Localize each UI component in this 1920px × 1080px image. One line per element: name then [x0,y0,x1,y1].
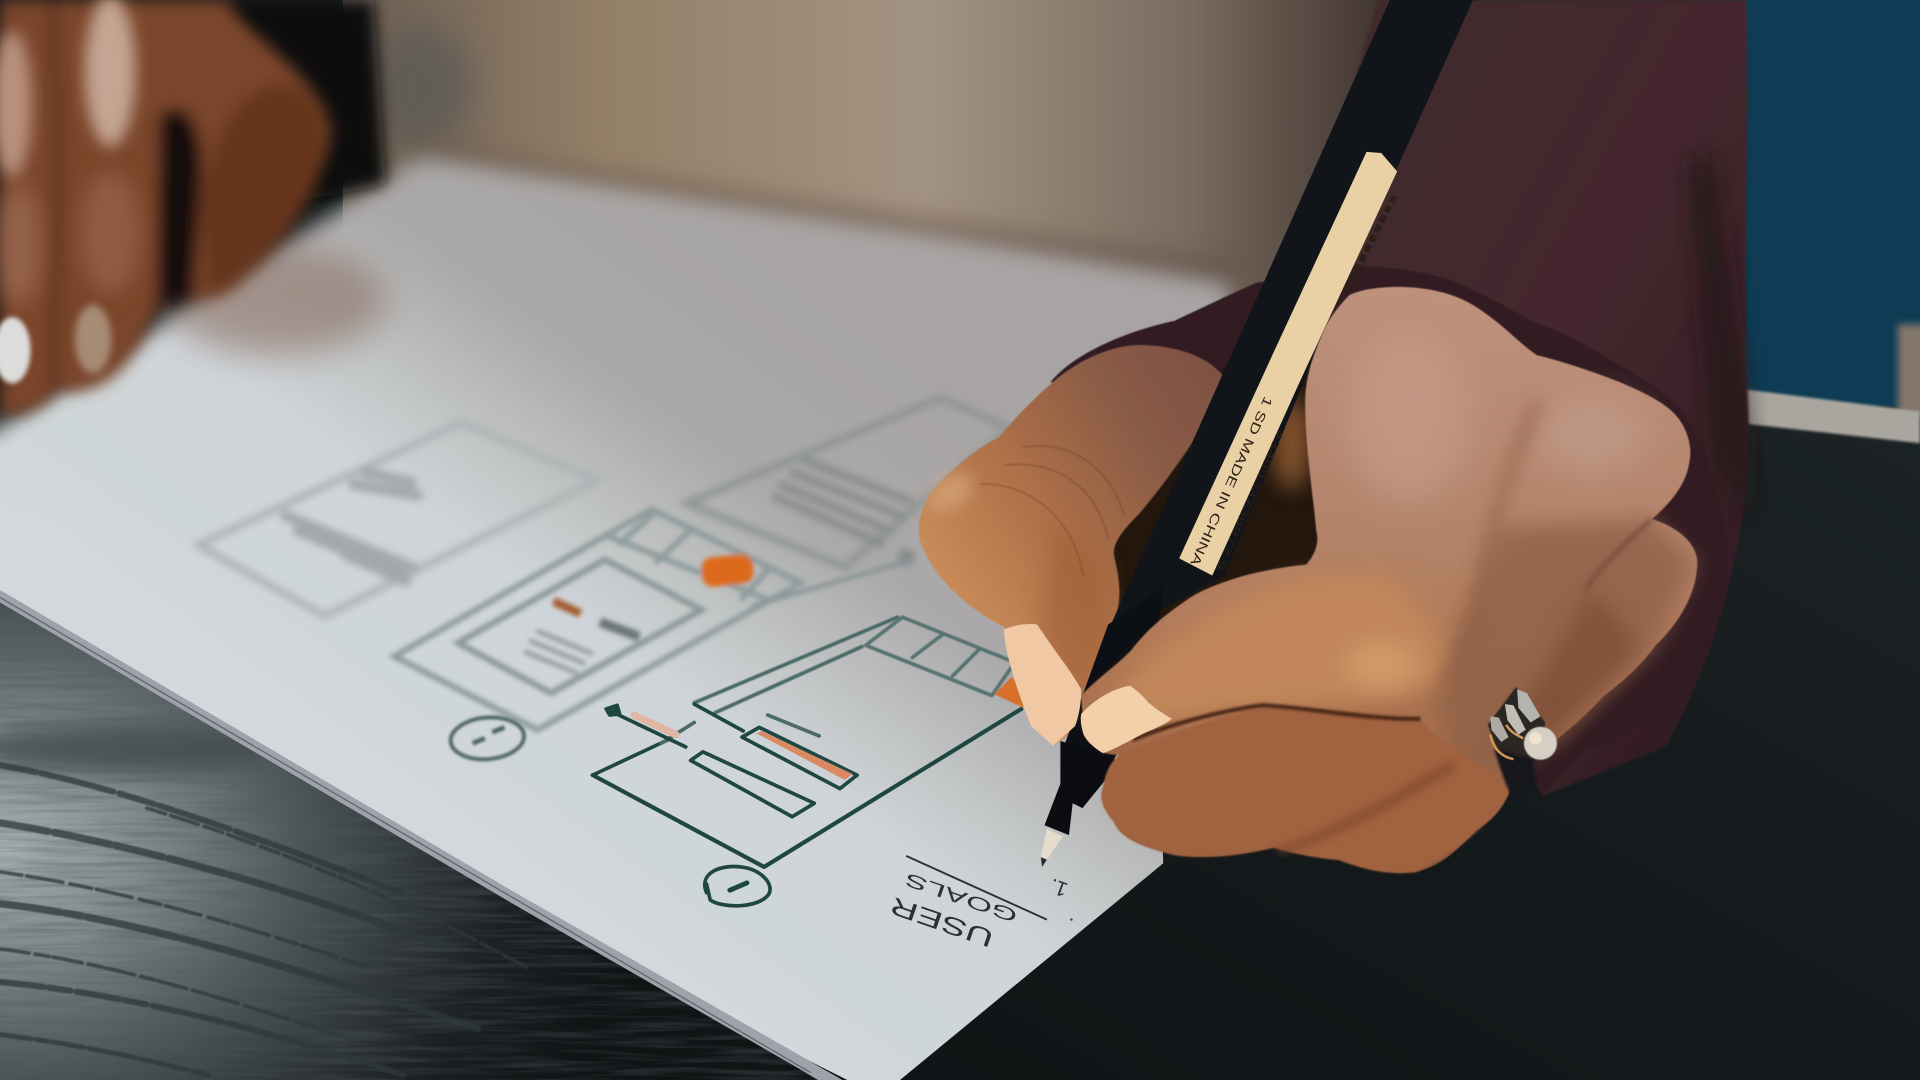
pen lower section [1063,588,1163,784]
handwritten list number: 1. [1047,873,1071,901]
handwritten heading: user goals: GOALS [902,869,1020,927]
step number 1 circle [705,866,770,906]
pen label strip [1179,152,1397,576]
wedding ring [1488,687,1557,798]
dark ring base [1488,687,1545,762]
right fingers shade [1433,519,1696,784]
right hand [1081,287,1697,873]
index finger glow [1090,576,1442,722]
table left glare and wood grain [0,588,833,1080]
knuckle gap crease [1586,519,1652,590]
fold above middle finger [1133,705,1420,740]
thumb knuckle creases [980,446,1124,576]
ring-finger knuckle highlight [1537,398,1647,471]
orange-highlighted rectangle [742,727,857,789]
sweater [1298,0,1749,796]
pen clip dark print [1344,196,1395,294]
blurred wireframe: far left [198,422,598,616]
warm reflection beside pen label [1272,397,1311,490]
pen barrel [1102,0,1473,661]
finger highlights [84,0,136,147]
pen label imprint: 4349933738977 9 [1213,427,1286,572]
pen tip [1041,829,1063,867]
index fingernail [1081,686,1172,753]
gold arcs [1490,725,1523,759]
handwritten heading rule [906,856,1047,920]
thumb [919,345,1231,746]
index side fold [1438,398,1545,686]
thumb underside warm shade [1041,527,1110,722]
back of hand highlight [1347,331,1469,502]
silver bands [1517,689,1540,722]
paper corner dot [1070,918,1073,921]
paper stack page lines [0,598,811,1073]
sweater right side shadow [1687,159,1749,514]
blurred wireframe: far right [687,398,1010,567]
mid wireframe with orange block [394,509,912,730]
thumb tip highlight [921,465,979,519]
black cuff [196,0,386,208]
fingernails [0,317,31,383]
arrow pointer [606,705,686,747]
handwritten heading: user goals: USER [887,891,997,952]
handwritten heading: user goals [887,869,1020,952]
paper sheet, soft far edge [0,157,1229,563]
paper sheet, sharp near area [0,514,1163,1080]
middle finger lower crease [1273,759,1457,855]
main wireframe drawing [593,617,1021,906]
orange block at edge of main wireframe [994,677,1029,708]
thumbnail [1004,624,1081,746]
pen label imprint: 1 SD MADE IN CHINA [1187,394,1276,569]
soft shadow of left hand on paper [165,245,386,355]
paper stack edge [0,590,842,1080]
lower knuckle shade [1506,588,1641,741]
black band [1494,749,1536,798]
blue background panel [1727,0,1920,416]
left hand [0,0,386,415]
index knuckle highlight [1344,640,1418,689]
pen nib holder [1044,741,1120,835]
diamond [1524,727,1557,760]
shadow between thumb and hand [1108,367,1329,649]
pen label imprint [1187,394,1286,572]
middle finger [1102,708,1509,873]
top row of wireframe [866,617,1011,696]
blurred background wall [343,0,1445,367]
small rectangle [691,752,814,817]
table edge highlight [1745,389,1920,443]
step number 2 circle [449,714,526,762]
fingers [0,0,331,415]
sweater cuff [1051,266,1726,796]
